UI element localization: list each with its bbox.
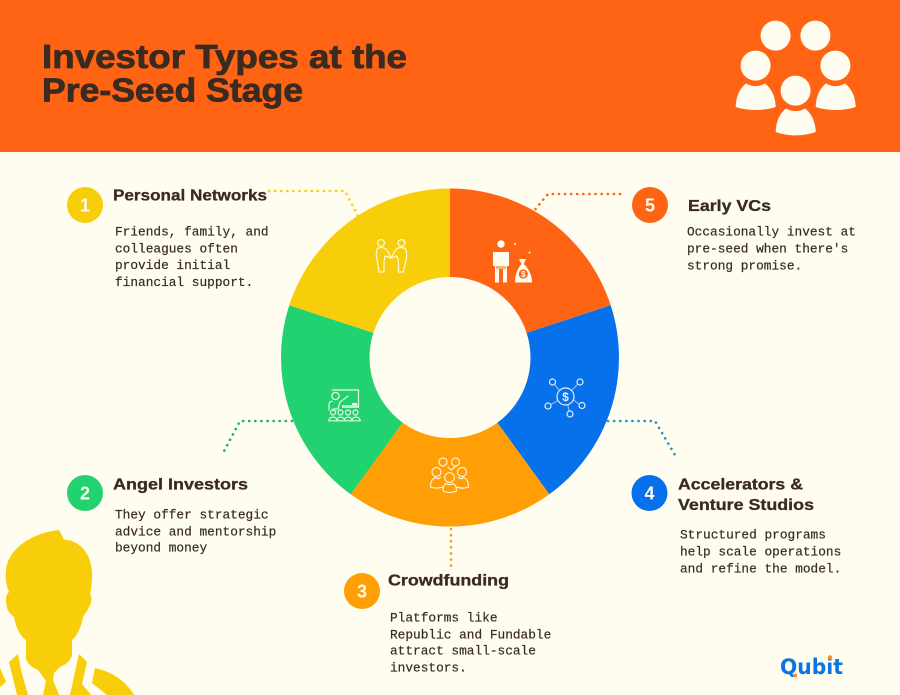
badge 4	[632, 475, 668, 511]
item 4: accelerators	[632, 475, 841, 576]
title: Pre-Seed Stage	[42, 72, 303, 108]
body text 2	[115, 508, 276, 556]
icon: handshake	[376, 240, 407, 272]
heading 4: Venture Studios	[678, 497, 814, 514]
body text 4: help scale operations	[680, 544, 841, 560]
icon: investor with money bag	[493, 240, 532, 282]
heading 1: Personal Networks	[113, 188, 267, 204]
body text 2: beyond money	[115, 540, 207, 556]
segment: accelerators	[497, 305, 619, 494]
icon: dollar network: $	[562, 390, 569, 404]
body text 4	[680, 528, 841, 576]
body text 5	[687, 224, 856, 274]
badge 5: 5	[645, 196, 655, 216]
icon: teacher and audience	[328, 390, 360, 421]
item 5: early VCs	[632, 187, 856, 274]
heading 4: Accelerators &	[678, 476, 803, 494]
body text 3: Republic and Fundable	[390, 628, 551, 642]
badge 1: 1	[80, 196, 90, 216]
body text 5: strong promise.	[687, 258, 802, 274]
body text 5: Occasionally invest at	[687, 224, 856, 240]
body text 3: Platforms like	[390, 610, 498, 626]
body text 4: and refine the model.	[680, 562, 841, 576]
heading 2: Angel Investors	[113, 476, 248, 494]
heading 4	[678, 476, 814, 514]
title: Investor Types at the	[42, 38, 407, 75]
heading 5: Early VCs	[688, 198, 771, 215]
icon: crowd of people	[430, 458, 468, 492]
body text 3: attract small-scale	[390, 644, 536, 658]
badge 3	[344, 573, 380, 609]
heading 3: Crowdfunding	[388, 572, 509, 590]
body text 1	[115, 224, 269, 290]
body text 1: colleagues often	[115, 242, 238, 256]
item 2: angel investors	[67, 475, 276, 556]
segment: early VCs	[450, 188, 611, 333]
body text 2: advice and mentorship	[115, 524, 276, 540]
body text 3	[390, 610, 551, 676]
badge 2: 2	[80, 484, 90, 504]
segment: angel investors	[281, 305, 403, 494]
silhouette: businessman	[0, 530, 134, 695]
header band	[0, 0, 900, 152]
logo: Qubit: Qubit	[780, 655, 843, 679]
body text 1: financial support.	[115, 275, 253, 290]
badge 2	[67, 475, 103, 511]
item 3: crowdfunding	[344, 572, 551, 676]
icon: investor with money bag: $	[521, 270, 526, 279]
badge 5	[632, 187, 668, 223]
item 1: personal networks	[67, 187, 269, 290]
icon: group of people	[736, 21, 856, 135]
badge 1	[67, 187, 103, 223]
body text 2: They offer strategic	[115, 508, 269, 522]
body text 5: pre-seed when there's	[687, 242, 848, 256]
donut chart	[281, 188, 619, 527]
body text 1: Friends, family, and	[115, 224, 269, 240]
body text 4: Structured programs	[680, 528, 826, 542]
badge 4: 4	[644, 484, 655, 504]
segment: personal networks	[289, 188, 450, 333]
body text 3: investors.	[390, 660, 467, 676]
body text 1: provide initial	[115, 258, 230, 273]
segment: crowdfunding	[351, 423, 549, 527]
icon: dollar network	[545, 379, 585, 417]
badge 3: 3	[357, 582, 367, 602]
title	[42, 38, 407, 108]
connector lines	[222, 191, 675, 566]
